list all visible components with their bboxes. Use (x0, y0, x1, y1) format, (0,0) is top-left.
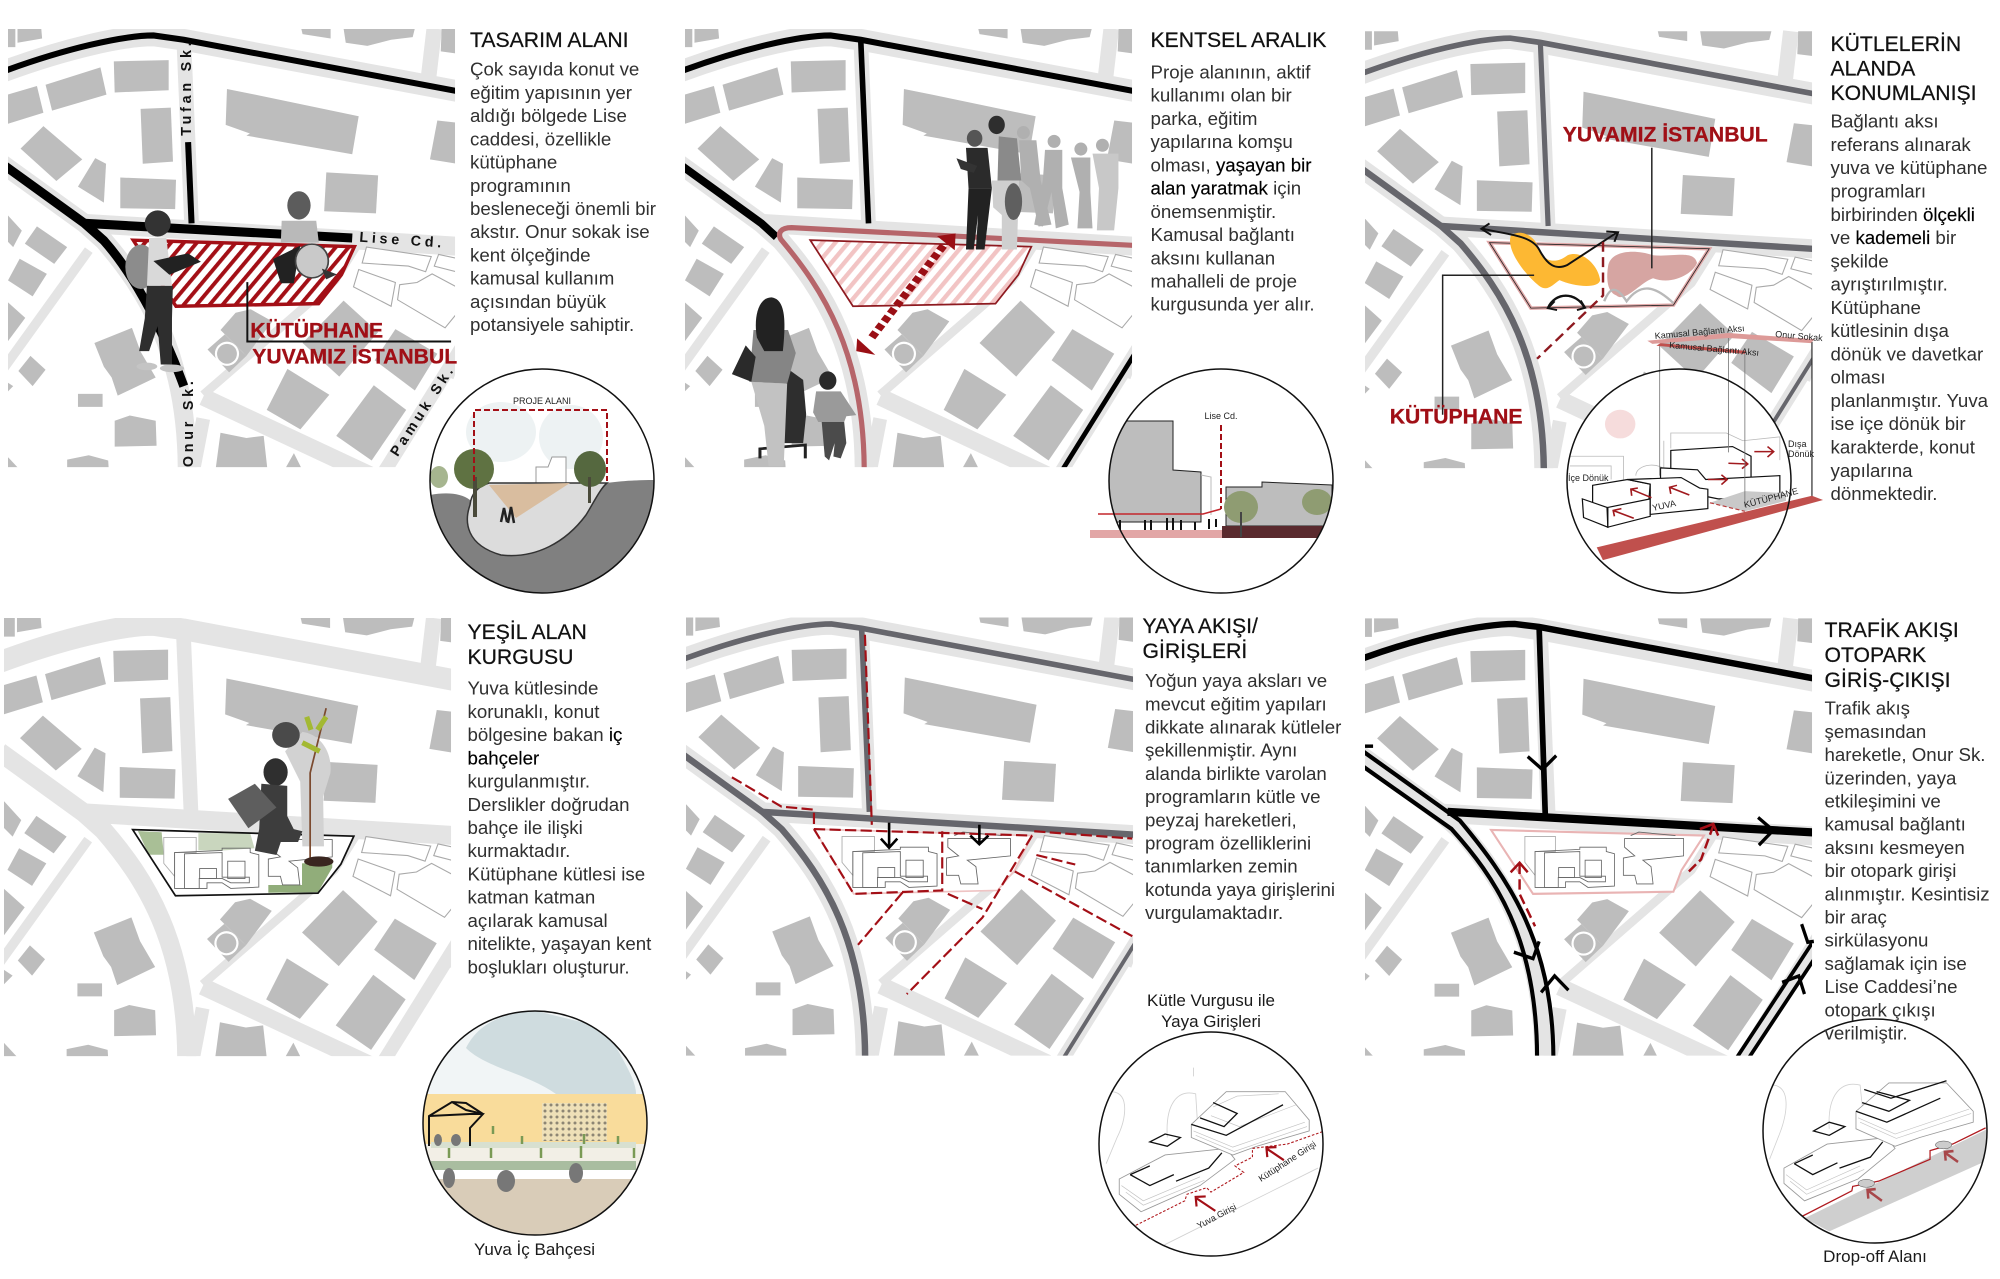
heading: KÜTLELERİN (1830, 32, 1961, 56)
body text: alınmıştır. Kesintisiz (1824, 883, 1990, 904)
body text: hareketle, Onur Sk. (1824, 744, 1986, 765)
label line: kütüphane (1443, 275, 1534, 415)
heading: YEŞİL ALAN (468, 620, 587, 644)
map area: route, arrow and figures (677, 29, 1141, 475)
body text: verilmiştir. (1824, 1022, 1908, 1044)
body text: vurgulamaktadır. (1145, 902, 1283, 923)
body text: aksını kullanan (1150, 247, 1275, 268)
body text: akstır. Onur sokak ise (470, 221, 650, 242)
body text: sağlamak için ise (1824, 953, 1967, 974)
site map with gray roads and pedestrian routes (678, 617, 1142, 1063)
body text: şekilde (1830, 250, 1889, 271)
body text: aksını kesmeyen (1824, 837, 1965, 858)
body text: şekillenmiştir. Aynı (1145, 740, 1297, 761)
panel: tasarım alanı (0, 29, 661, 597)
figure: child on toy car (273, 191, 337, 283)
body text: Kütüphane kütlesi ise (468, 863, 645, 884)
inset circle: drop-off axonometric (1763, 1019, 1990, 1243)
body text: kent ölçeğinde (470, 244, 591, 265)
body text: olması (1830, 367, 1886, 388)
body text: programları (1830, 181, 1926, 202)
pedestrian routes: dashed red lines (732, 635, 1132, 994)
heading: KENTSEL ARALIK (1150, 29, 1326, 52)
body text: etkileşimini ve (1824, 790, 1941, 812)
body text: sirkülasyonu (1824, 930, 1928, 951)
body text: korunaklı, konut (468, 701, 600, 722)
site plan outline (1491, 830, 1704, 894)
body text: yapılarına komşu (1150, 131, 1293, 152)
body text: ayrıştırılmıştır. (1830, 274, 1948, 295)
body text: potansiyele sahiptir. (470, 314, 634, 335)
caption: Yaya Girişleri (1161, 1012, 1261, 1031)
body text: alan yaratmak için (1150, 178, 1301, 199)
pink ground strip (1090, 530, 1222, 538)
tiny labels in massing inset: Dönük (1788, 449, 1815, 459)
body text: Kamusal bağlantı (1150, 224, 1295, 245)
tiny labels: Kütüphane Girişi (1257, 1139, 1318, 1184)
body text: açılarak kamusal (468, 910, 608, 931)
body text: dikkate alınarak kütleler (1145, 717, 1341, 738)
label line: yuvamız (1651, 148, 1653, 268)
tiny labels (1195, 1139, 1318, 1231)
red ground axis (1597, 496, 1823, 560)
figures: couple reading (956, 116, 1022, 249)
map area: site plan, figures and labels (0, 29, 465, 475)
figure: mother with stroller (732, 297, 806, 466)
panel: kentsel aralık (677, 29, 1333, 593)
body text: üzerinden, yaya (1824, 767, 1957, 788)
body text: Lise Caddesi’ne (1824, 976, 1957, 997)
body text: Bağlantı aksı (1830, 111, 1939, 132)
body text: Kütüphane (1830, 297, 1921, 318)
body text: planlanmıştır. Yuva (1830, 390, 1989, 411)
red section line (1098, 509, 1221, 514)
tiny labels: Yuva Girişi (1195, 1202, 1238, 1231)
caption: Drop-off Alanı (1823, 1247, 1927, 1266)
site map with highlighted route (677, 29, 1141, 475)
body text: programının (470, 175, 571, 196)
inset circle: street section (1090, 369, 1333, 593)
body text: bir otopark girişi (1824, 860, 1956, 881)
body text: aldığı bölgede Lise (470, 105, 627, 126)
heading: KONUMLANIŞI (1830, 82, 1976, 105)
heading: GİRİŞ-ÇIKIŞI (1824, 668, 1950, 692)
body text: ve kademeli bir (1830, 227, 1956, 248)
caption: Kütle Vurgusu ile (1147, 991, 1275, 1010)
tiny labels in massing inset: İçe Dönük (1568, 473, 1609, 483)
body text: kamusal bağlantı (1824, 814, 1966, 835)
body text: birbirinden ölçekli (1830, 204, 1975, 225)
tiny labels in massing inset: Kamusal Bağlantı Aksı (1669, 340, 1759, 358)
body text: peyzaj hareketleri, (1145, 809, 1297, 830)
body text: şemasından (1824, 721, 1926, 742)
stray letter beside inset: n (1104, 1161, 1114, 1180)
body text: karakterde, konut (1830, 436, 1976, 457)
body text: olması, yaşayan bir (1150, 154, 1312, 175)
heading: YAYA AKIŞI/ (1142, 615, 1258, 638)
site map with black traffic roads (1357, 618, 1821, 1064)
body text: tanımlarken zemin (1145, 856, 1298, 877)
label: yuvamız istanbul: YUVAMIZ İSTANBUL (1563, 122, 1768, 146)
body text: program özelliklerini (1145, 832, 1311, 853)
heading: ALANDA (1830, 58, 1916, 80)
body text: programların kütle ve (1145, 786, 1321, 807)
site map with green layout (0, 618, 464, 1064)
body text: bahçeler (468, 747, 539, 768)
body text: mahalleli de proje (1150, 270, 1297, 291)
figure: woman and child planting a tree (228, 708, 333, 867)
figure: woman with backpack (125, 210, 201, 372)
inset circle: street view: PROJE ALANI (513, 396, 571, 406)
tiny labels in massing inset: KÜTÜPHANE (1743, 486, 1799, 510)
map area: traffic roads and arrows (1357, 618, 1821, 1064)
street label: tufan: Tufan Sk. (179, 39, 195, 136)
body text: Proje alanının, aktif (1150, 62, 1311, 82)
street label: lise: Lise Cd. (359, 230, 446, 252)
body text: kullanımı olan bir (1150, 85, 1292, 106)
heading: KURGUSU (468, 646, 573, 669)
body text: bahçe ile ilişki (468, 817, 583, 838)
body text: besleneceği önemli bir (470, 198, 656, 219)
body text: Derslikler doğrudan (468, 794, 630, 815)
body text: eğitim yapısının yer (470, 82, 632, 103)
body text: kütüphane (470, 152, 557, 173)
panel: yeşil alan kurgusu (0, 618, 657, 1259)
body text: mevcut eğitim yapıları (1145, 693, 1327, 714)
body text: parka, eğitim (1150, 108, 1257, 129)
panel: yaya akışı (678, 615, 1347, 1256)
inset circle: pedestrian entrances axonometric (1099, 1032, 1324, 1256)
figures: walking group (1017, 126, 1118, 230)
body text: yapılarına (1830, 460, 1913, 481)
tiny labels in massing inset: Dışa (1788, 439, 1807, 449)
flow arrows (1514, 756, 1814, 994)
upper connection plane (1647, 333, 1815, 344)
body text: dönmektedir. (1830, 483, 1938, 504)
label: kütüphane: KÜTÜPHANE (250, 318, 383, 343)
map area: routes and entrances (678, 617, 1142, 1063)
body text: ise içe dönük bir (1830, 413, 1966, 434)
label: yuvamız istanbul: YUVAMIZ İSTANBUL (252, 344, 457, 368)
heading: GİRİŞLERİ (1142, 639, 1247, 663)
body text: kamusal kullanım (470, 268, 614, 289)
lower connection plane (1656, 343, 1746, 354)
tiny labels in massing inset (1568, 323, 1824, 513)
panel: trafik akışı (1357, 618, 1995, 1266)
body text: alanda birlikte varolan (1145, 763, 1327, 784)
map area: masses and labels (1357, 31, 1821, 477)
body text: referans alınarak (1830, 134, 1971, 155)
body text: caddesi, özellikle (470, 128, 611, 149)
inset circle: street view (430, 369, 656, 597)
site map with black roads and hatched site (0, 29, 465, 475)
body text: Yoğun yaya aksları ve (1145, 670, 1327, 691)
arrow: dashed double-headed connection (856, 233, 956, 355)
body text: açısından büyük (470, 291, 607, 312)
inset: massing axonometric with connection planes (1567, 323, 1824, 593)
body text: kotunda yaya girişlerini (1145, 879, 1335, 900)
body text: nitelikte, yaşayan kent (468, 933, 652, 954)
body text: kütlesinin dışa (1830, 320, 1950, 341)
heading: TASARIM ALANI (470, 29, 629, 52)
body text: yuva ve kütüphane (1830, 157, 1987, 178)
parking entry arrows: red (1511, 824, 1718, 926)
body text: katman katman (468, 887, 595, 908)
body text: kurgusunda yer alır. (1150, 294, 1315, 315)
tiny labels in massing inset: Onur Sokak (1775, 329, 1824, 343)
body text: otopark çıkışı (1824, 999, 1936, 1020)
body text: Çok sayıda konut ve (470, 59, 639, 80)
site plan outlines (814, 829, 1032, 894)
body text: bir araç (1824, 906, 1887, 928)
site map with gray roads (1357, 31, 1821, 477)
inset circle: street section: Lise Cd. (1204, 411, 1238, 421)
body text: Trafik akış (1824, 698, 1910, 719)
heading: TRAFİK AKIŞI (1824, 618, 1959, 642)
street label: onur: Onur Sk. (181, 377, 197, 467)
inset circle: yuva garden (423, 1011, 647, 1235)
entrance arrows (881, 823, 988, 848)
label: kütüphane: KÜTÜPHANE (1390, 404, 1523, 429)
body text: bölgesine bakan iç (468, 724, 622, 745)
panel: kütlelerin alanda konumlanışı (1357, 31, 1993, 593)
body text: Yuva kütlesinde (468, 678, 598, 699)
figure: toddler (813, 371, 856, 460)
body text: dönük ve davetkar (1830, 343, 1983, 364)
body text: kurmaktadır. (468, 840, 570, 861)
street label: pamuk: Pamuk Sk. (388, 362, 459, 459)
heading: OTOPARK (1824, 644, 1926, 667)
body text: boşlukları oluşturur. (468, 956, 630, 977)
tiny labels in massing inset: YUVA (1651, 498, 1677, 513)
body text: kurgulanmıştır. (468, 771, 590, 792)
body text: önemsenmiştir. (1150, 201, 1276, 222)
site diagram: program masses and arrows (1481, 223, 1709, 359)
label line (247, 282, 451, 342)
caption: Yuva İç Bahçesi (474, 1240, 595, 1259)
tiny labels in massing inset: Kamusal Bağlantı Aksı (1654, 323, 1745, 341)
map area: green layout and figures (0, 618, 464, 1064)
